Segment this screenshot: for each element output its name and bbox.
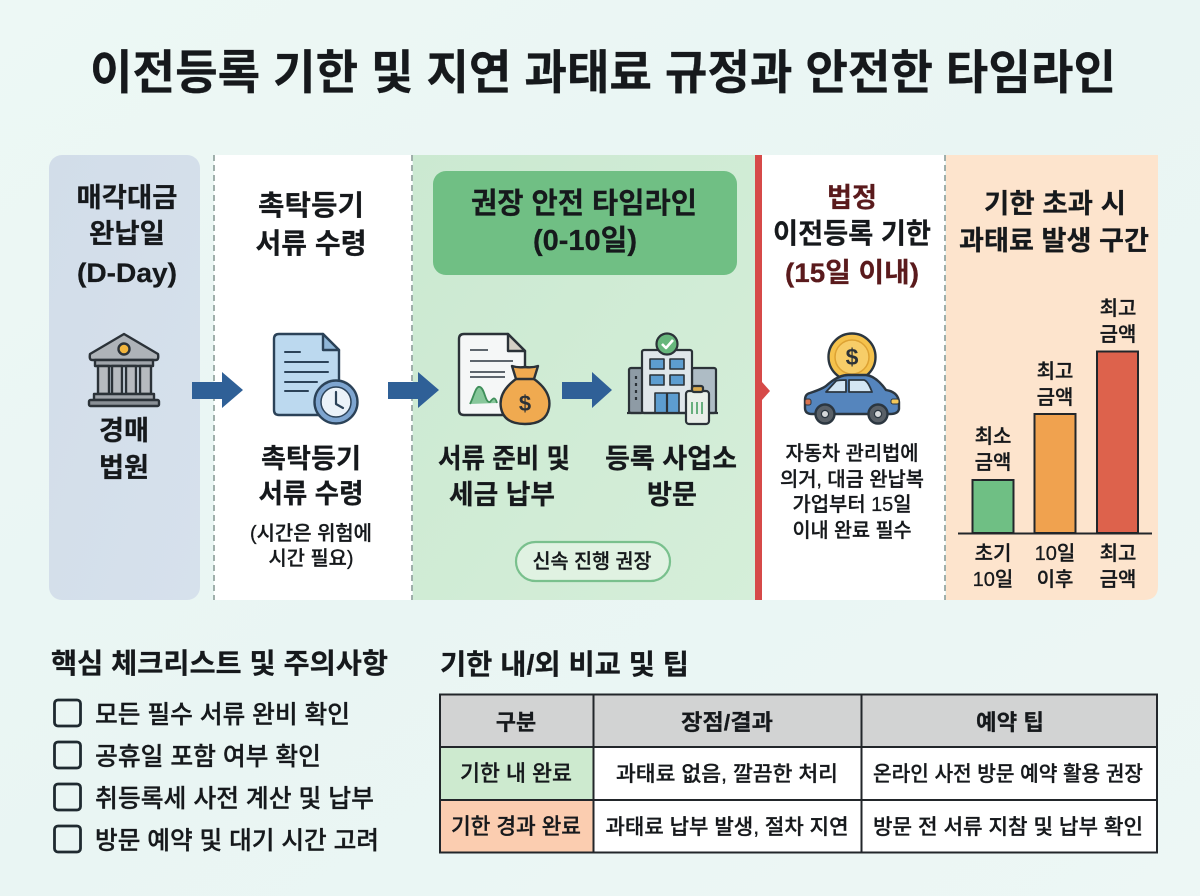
icon: registration office xyxy=(627,334,718,424)
badge: prompt action xyxy=(516,542,670,581)
icon: document with clock xyxy=(274,334,358,424)
row: within deadline: 온라인 사전 방문 예약 활용 권장 xyxy=(873,763,1143,786)
icon: document with money bag: $ xyxy=(519,391,531,416)
row: past deadline: 과태료 납부 발생, 절차 지연 xyxy=(606,816,848,839)
heading box: recommended timeline xyxy=(433,171,737,275)
header row: 구분 xyxy=(496,710,536,735)
bar chart: penalty: 최고 xyxy=(1037,360,1073,383)
label: documents and tax xyxy=(438,444,570,510)
item 4: 방문 예약 및 대기 시간 고려 xyxy=(95,827,379,855)
label: court: 법원 xyxy=(99,453,149,483)
label: office visit: 방문 xyxy=(647,480,697,510)
heading: legal deadline xyxy=(773,183,931,288)
label: court xyxy=(99,416,149,483)
label: office visit: 등록 사업소 xyxy=(605,444,737,474)
heading: D-Day: (D-Day) xyxy=(77,258,177,288)
icon: car with coin xyxy=(805,334,899,424)
text: legal basis: 이내 완료 필수 xyxy=(792,519,912,542)
label: court: 경매 xyxy=(99,416,149,446)
marker: red deadline line xyxy=(755,155,770,600)
bar chart: penalty: 금액 xyxy=(1100,323,1136,346)
arrow: step 2 to 3 xyxy=(388,372,439,408)
text: legal basis: 의거, 대금 완납복 xyxy=(780,468,924,491)
bar chart: penalty: 이후 xyxy=(1037,568,1073,591)
heading: document receipt: 촉탁등기 xyxy=(258,190,364,221)
row: within deadline: 기한 내 완료 xyxy=(460,761,572,786)
row: past deadline xyxy=(451,814,1143,839)
label: documents and tax: 서류 준비 및 xyxy=(438,444,570,474)
heading: legal deadline: 이전등록 기한 xyxy=(773,218,931,249)
label: document receipt: 촉탁등기 xyxy=(261,444,361,474)
heading: document receipt xyxy=(256,190,366,259)
bar chart: penalty: 금액 xyxy=(975,451,1011,474)
title: 이전등록 기한 및 지연 과태료 규정과 안전한 타임라인 xyxy=(90,46,1116,99)
header row: 예약 팁 xyxy=(976,710,1044,735)
heading: document receipt: 서류 수령 xyxy=(256,228,366,259)
bar chart: penalty: 최고 xyxy=(1100,542,1136,565)
heading: checklist: 핵심 체크리스트 및 주의사항 xyxy=(51,648,388,679)
heading: D-Day xyxy=(76,183,178,288)
arrow: step 1 to 2 xyxy=(192,372,243,408)
label: documents and tax: 세금 납부 xyxy=(449,480,555,510)
bar chart: penalty: 초기 xyxy=(975,542,1011,565)
label: office visit xyxy=(605,444,737,510)
arrow: step 3 to 4 xyxy=(562,372,612,408)
panel: legal deadline xyxy=(762,155,945,600)
text: legal basis: 자동차 관리법에 xyxy=(786,442,918,465)
bar chart: penalty xyxy=(958,297,1152,591)
panel: recommended timeline xyxy=(413,155,755,600)
row: within deadline: 과태료 없음, 깔끔한 처리 xyxy=(616,763,838,786)
label: document receipt xyxy=(258,444,364,509)
heading: penalty zone: 기한 초과 시 xyxy=(984,189,1126,219)
row: past deadline: 기한 경과 완료 xyxy=(451,814,581,839)
row: within deadline xyxy=(460,761,1143,786)
text: legal basis: 가업부터 15일 xyxy=(792,493,912,516)
panel: document receipt xyxy=(214,155,412,600)
icon: document with money bag xyxy=(459,334,549,424)
heading box: recommended timeline: 권장 안전 타임라인 xyxy=(471,187,697,220)
heading: D-Day: 매각대금 xyxy=(76,183,178,213)
badge: prompt action: 신속 진행 권장 xyxy=(532,550,652,573)
heading: legal deadline: 법정 xyxy=(827,183,877,213)
label: document receipt: 서류 수령 xyxy=(258,479,364,509)
panel: D-Day xyxy=(49,155,200,600)
bar chart: penalty: 10일 xyxy=(1035,542,1075,565)
item 3: 취등록세 사전 계산 및 납부 xyxy=(95,785,374,813)
note: time needed: 시간 필요) xyxy=(268,547,354,570)
header row xyxy=(496,710,1044,735)
panel: penalty zone xyxy=(946,155,1158,600)
comparison table xyxy=(440,694,1157,853)
icon: car with coin: $ xyxy=(846,344,859,370)
bar chart: penalty: 금액 xyxy=(1100,568,1136,591)
row: past deadline: 방문 전 서류 지참 및 납부 확인 xyxy=(873,816,1143,839)
item 2: 공휴일 포함 여부 확인 xyxy=(95,743,321,771)
heading: comparison table: 기한 내/외 비교 및 팁 xyxy=(440,649,689,680)
note: time needed: (시간은 위험에 xyxy=(250,522,372,545)
text: legal basis xyxy=(780,442,924,542)
heading: legal deadline: (15일 이내) xyxy=(785,258,919,288)
bar chart: penalty: 금액 xyxy=(1037,386,1073,409)
item 1: 모든 필수 서류 완비 확인 xyxy=(95,701,350,729)
icon: court building xyxy=(89,334,159,406)
heading: penalty zone xyxy=(959,189,1149,256)
bar chart: penalty: 10일 xyxy=(973,568,1013,591)
note: time needed xyxy=(250,522,372,570)
header row: 장점/결과 xyxy=(681,710,773,735)
heading: D-Day: 완납일 xyxy=(89,219,165,249)
bar chart: penalty: 최고 xyxy=(1100,297,1136,320)
heading box: recommended timeline: (0-10일) xyxy=(533,224,637,257)
checklist xyxy=(54,700,379,855)
bar chart: penalty: 최소 xyxy=(975,425,1011,448)
heading: penalty zone: 과태료 발생 구간 xyxy=(959,226,1149,256)
